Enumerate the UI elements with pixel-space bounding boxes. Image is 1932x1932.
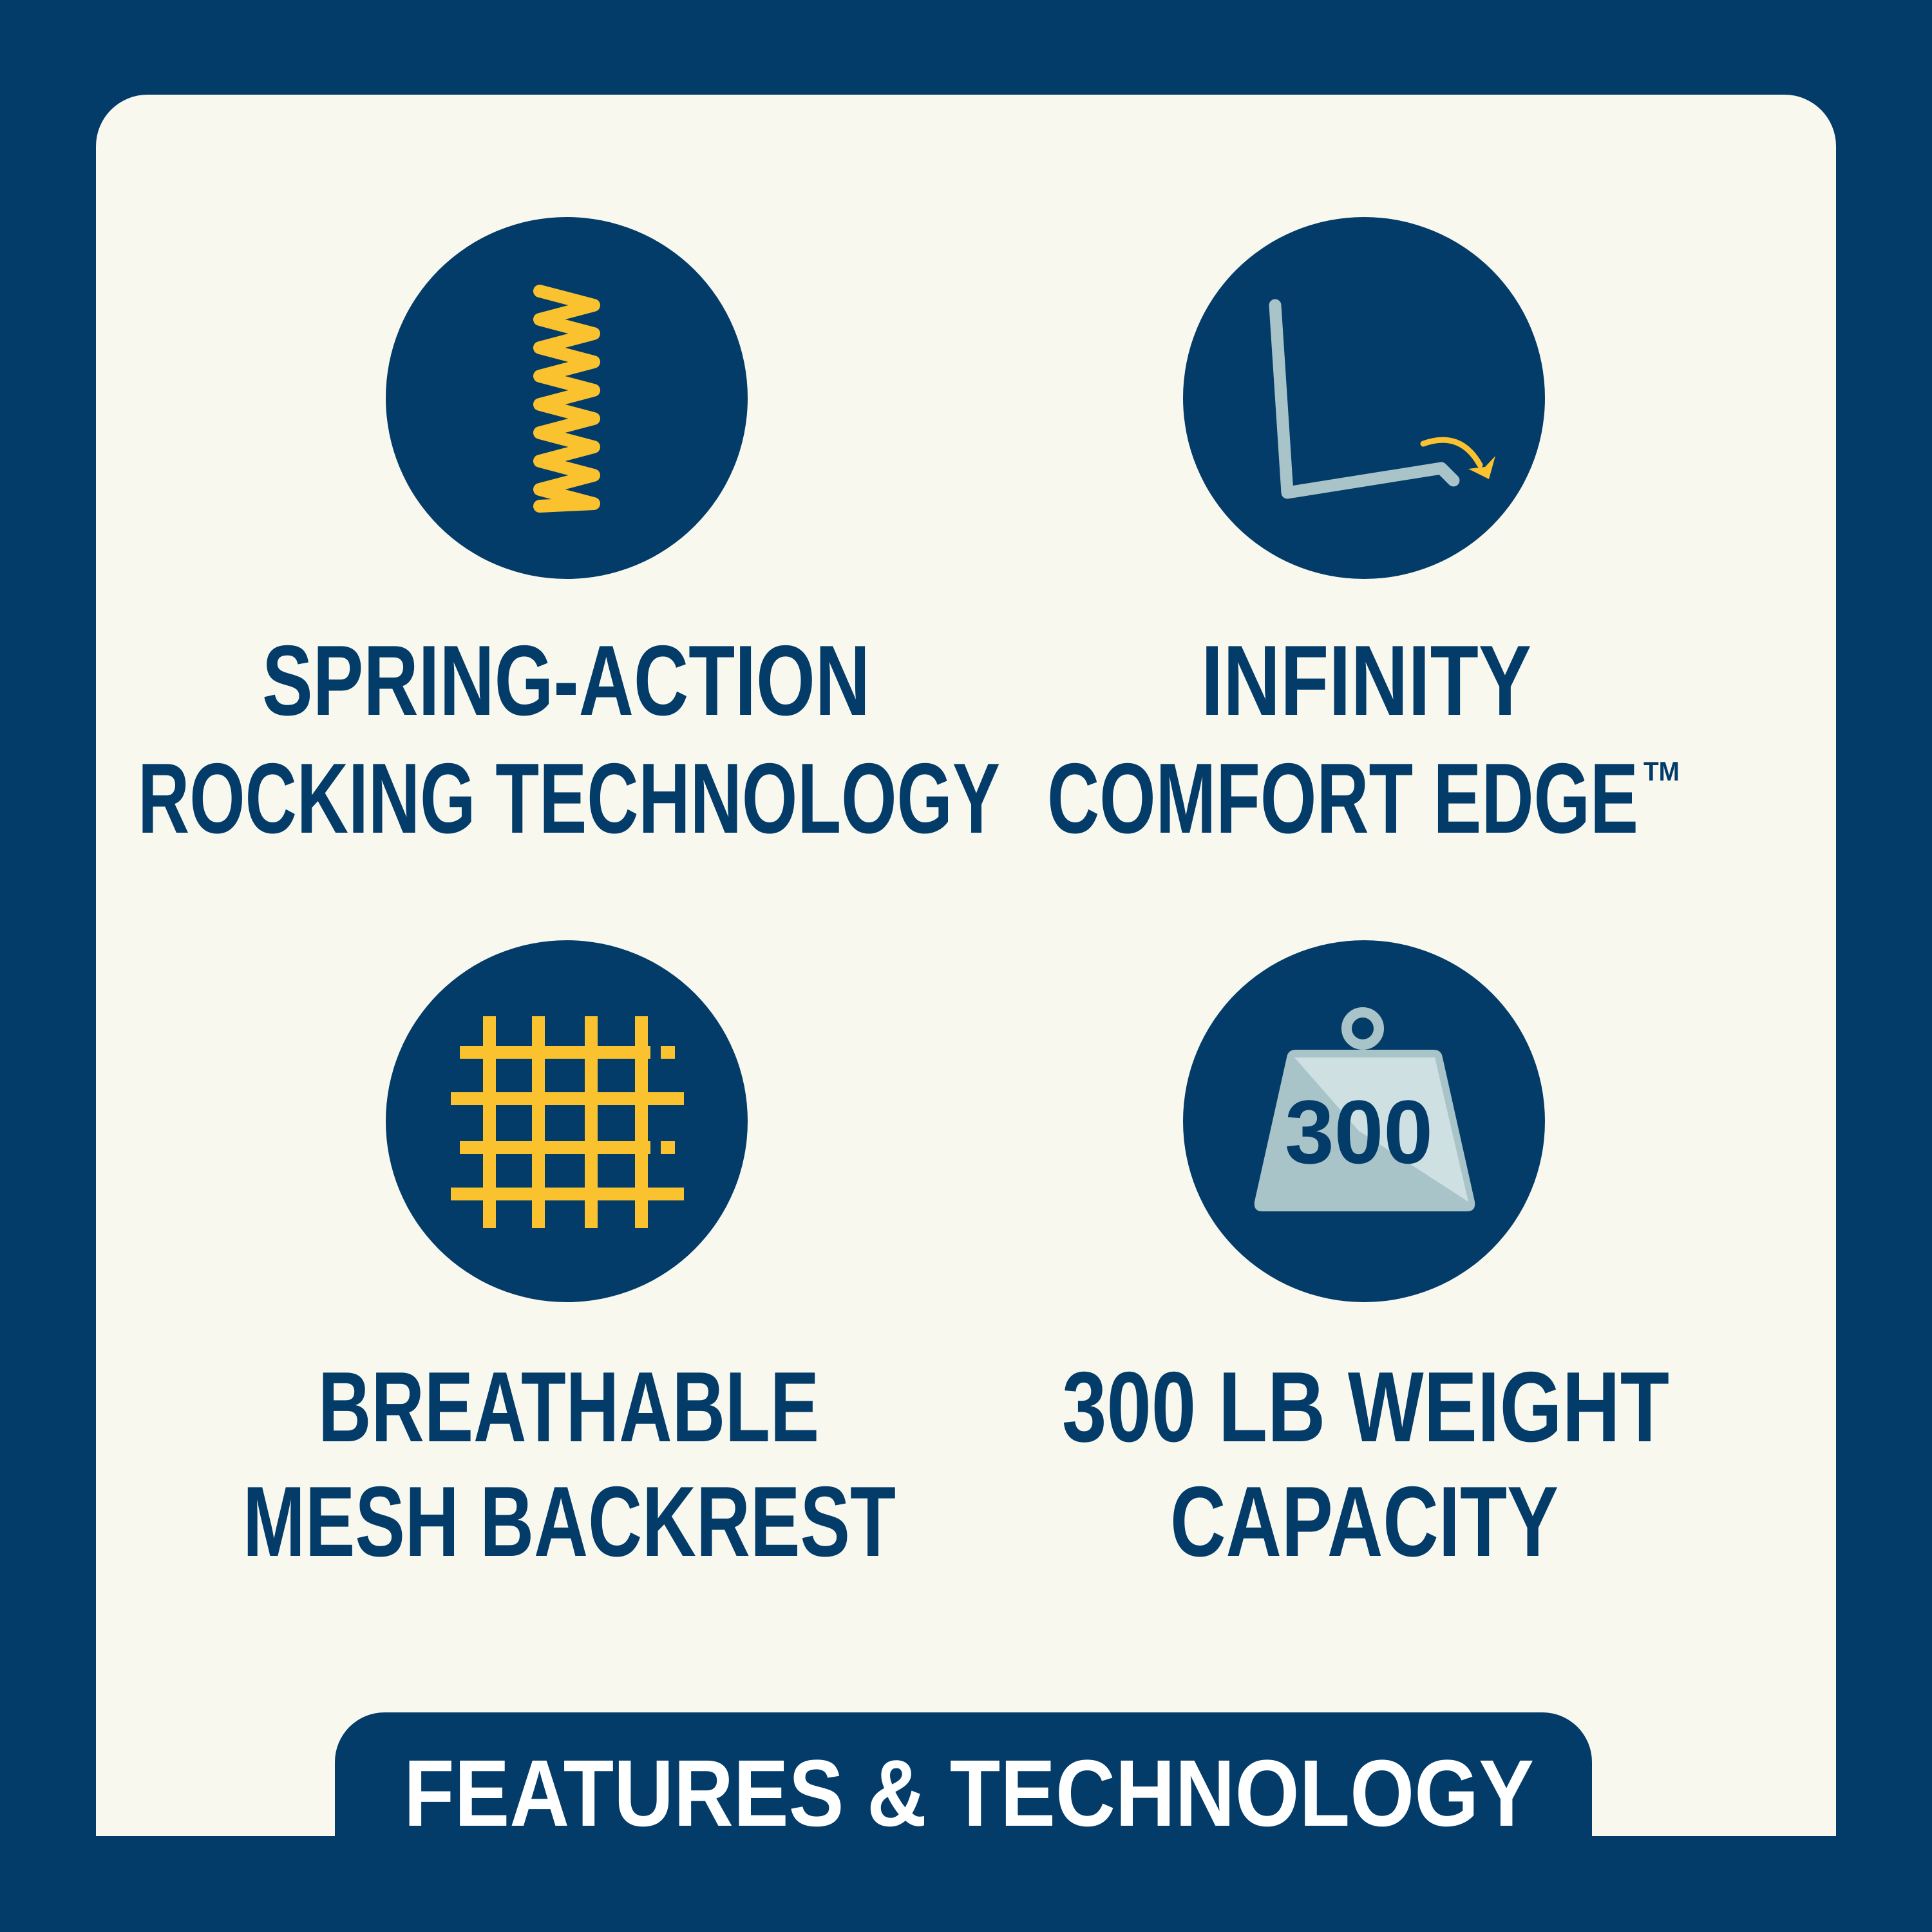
icon: infinity comfort edge circle [1183, 217, 1545, 579]
text: infinity comfort edge: INFINITY [1201, 625, 1531, 736]
text: spring-action: ROCKING TECHNOLOGY [138, 743, 1000, 854]
icon: mesh circle [386, 940, 748, 1302]
text: weight capacity: CAPACITY [1170, 1466, 1558, 1577]
text: weight capacity [1062, 1351, 1669, 1577]
text: infinity comfort edge: COMFORT EDGE [1047, 743, 1638, 854]
text: breathable mesh: MESH BACKREST [243, 1466, 896, 1577]
icon: spring circle [386, 217, 748, 579]
footer tab: FEATURES & TECHNOLOGY [404, 1741, 1534, 1846]
text: spring-action [138, 625, 1000, 854]
text: breathable mesh [243, 1351, 896, 1577]
footer tab [335, 1712, 1592, 1932]
text: weight capacity: 300 LB WEIGHT [1062, 1351, 1669, 1463]
text: breathable mesh: BREATHABLE [318, 1351, 819, 1463]
text: spring-action: SPRING-ACTION [262, 625, 870, 736]
icon: weight circle: 300 [1285, 1081, 1433, 1182]
text: infinity comfort edge [1047, 625, 1680, 854]
icon: weight circle [1183, 940, 1545, 1302]
text: infinity comfort edge: TM [1643, 756, 1680, 786]
